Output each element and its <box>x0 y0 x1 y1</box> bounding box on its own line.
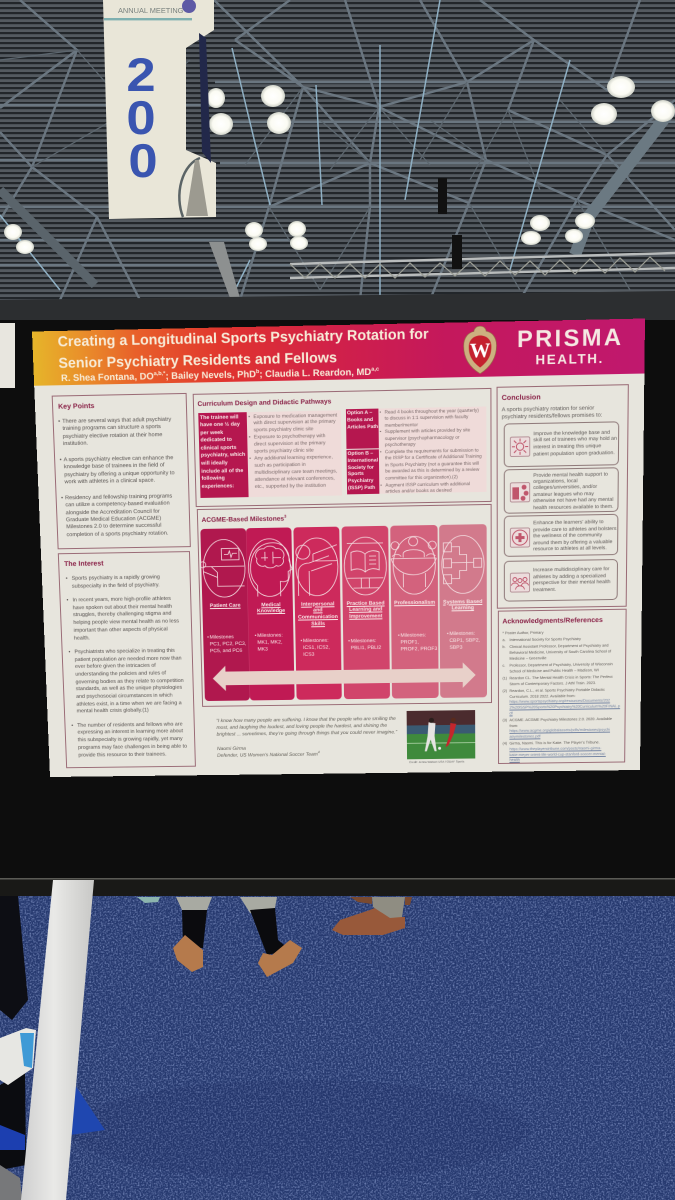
pink box: experiences: multidisciplinary care team meetings, <box>255 468 337 476</box>
card 2 text: otherwise not have had any mental <box>533 497 614 504</box>
carpet <box>0 896 675 1200</box>
references text: a. <box>502 638 506 642</box>
pink box: experiences: etc., supported by the institution <box>255 483 326 490</box>
interest text: programs may face challenges in being able to <box>78 744 187 751</box>
column 3: interpersonal and communication: Skills <box>311 621 325 627</box>
pink box: experiences: such as participation in <box>254 462 306 469</box>
key points text: work with athletes in a clinical space. <box>64 478 155 486</box>
red box: trainee commitment: will ideally <box>201 460 228 467</box>
column 2: medical knowledge <box>254 602 286 652</box>
column 3: interpersonal and communication: Milestones: <box>303 638 329 644</box>
systems based icon <box>443 543 451 552</box>
key points text: Residency and fellowship training programs <box>65 493 172 501</box>
panel: ACGME milestones <box>197 504 492 707</box>
pink box: options text: member/mentor <box>385 422 418 427</box>
banner sign 200: 2 <box>126 49 156 101</box>
references text: Medicine – Greenville <box>509 656 546 660</box>
references text: (3) <box>502 719 507 722</box>
column 3: interpersonal and communication: ICS3 <box>303 651 314 657</box>
card 1 text: interest in treating this unique <box>533 443 601 451</box>
pink box: experiences <box>247 410 342 497</box>
card 2 text: Provide mental health support to <box>533 471 608 478</box>
soccer photo <box>406 710 476 760</box>
pink box: options text: the ISSP for a Certificate of Additional Training <box>385 454 482 461</box>
column 4: practice based learning: Learning and <box>349 607 382 613</box>
panel: conclusion <box>497 384 629 609</box>
column 5: professionalism: Milestones: <box>400 632 426 639</box>
option A label: Books and <box>347 417 373 423</box>
interest text: patient population are needed more now than <box>75 655 182 663</box>
professionalism icon <box>409 537 418 546</box>
side tag on board <box>0 323 15 388</box>
references text: * Poster Author, Primary <box>502 630 544 635</box>
column 6: systems based learning <box>442 599 483 650</box>
key points text: Graduate Medical Education (ACGME) <box>66 516 161 523</box>
references text: from: <box>509 724 518 728</box>
card 1 text: patient population upon graduation. <box>533 450 615 458</box>
references text: b. <box>502 646 506 650</box>
column 2: medical knowledge: Knowledge <box>257 608 285 615</box>
milestone columns and icons <box>200 524 487 701</box>
pink box: options text: Read 4 books throughout the year (quarterly) <box>385 407 479 414</box>
card 3 text: around them by offering a valuable <box>533 539 612 546</box>
card 4 text: athletes by adding a specialized <box>533 573 606 580</box>
column 6: systems based learning: SBP3 <box>449 644 462 650</box>
references text: Girma, Naomi. This is for Katie. The Player’s Tribune. <box>509 741 600 746</box>
column 2: medical knowledge: MK3 <box>257 646 268 652</box>
conclusion intro: A sports psychiatry rotation for senior <box>502 405 594 413</box>
university crest logo: W <box>466 337 487 361</box>
option A label <box>346 409 379 449</box>
interest text: In recent years, more high-profile athletes <box>72 596 171 603</box>
medical knowledge icon <box>250 542 293 597</box>
references text: Reardon CL. The Mental Health Crisis in Sports: The Perfect <box>509 675 613 681</box>
red box: trainee commitment: dedicated to <box>200 437 232 444</box>
photo credit: Credit: Jenna Watson USA TODAY Sports <box>409 760 464 764</box>
references text: Professor, Department of Psychiatry, University of Wisconsin <box>509 662 613 668</box>
pink box: experiences: Any additional learning experience, <box>254 454 333 462</box>
card 3 text: provide care to athletes and bolsters <box>533 526 616 533</box>
interest text: ever before given the intricacies of <box>75 663 156 670</box>
panel: key points <box>52 393 191 549</box>
option B label <box>346 449 379 494</box>
references text <box>502 630 620 763</box>
heading: conclusion: Conclusion <box>502 394 541 402</box>
pink box: experiences: sports psychiatry clinic site <box>254 427 314 434</box>
red box: trainee commitment: include all of the <box>201 468 243 474</box>
quote: Defender, US Women’s National Soccer Team4 <box>217 750 320 759</box>
practice based learning icon <box>347 543 383 588</box>
column 5: professionalism <box>394 599 438 652</box>
overhead lights <box>4 76 675 254</box>
heading: curriculum: Curriculum Design and Didactic Pathways <box>197 398 331 408</box>
card 3 text: the wellness of the community <box>533 533 602 540</box>
column 2: medical knowledge: Milestones: <box>257 633 283 639</box>
red box: trainee commitment: have one ½ day <box>200 422 240 428</box>
key points text: psychiatry by offering a unique opportunity to <box>64 470 175 478</box>
references text: International Society for Sports Psychiatry <box>509 637 581 642</box>
conclusion intro: psychiatry residents/fellows promises to: <box>502 412 602 421</box>
card 2 text: health resources available to them. <box>533 503 613 511</box>
title: Senior Psychiatry Residents and Fellows <box>58 348 337 370</box>
key points text: completion of a sports psychiatry rotation. <box>66 530 168 538</box>
banner sign 200 <box>103 0 216 219</box>
interest text: expressing an interest in learning more about <box>77 729 183 736</box>
pink box: experiences: attendance at relevant conferences, <box>255 476 335 483</box>
banner sign 200: 0 <box>128 135 158 187</box>
column 2: medical knowledge: MK1, MK2, <box>257 639 282 646</box>
heading: key points: Key Points <box>58 403 95 411</box>
interpersonal icon <box>296 545 310 559</box>
key points text: Milestones 2.0 to determine successful <box>66 523 161 531</box>
references text: Curriculum. 2018 2022. Available from: <box>509 694 575 699</box>
card 3 text: Enhance the learners’ ability to <box>533 519 604 527</box>
red box: trainee commitment: experiences: <box>202 483 234 490</box>
interest text: standards, as well as the unique physiologies <box>76 685 182 692</box>
card 2 text: amateur leagues who may <box>533 491 594 498</box>
column 3: interpersonal and communication: ICS1, ICS2, <box>303 644 330 651</box>
interest text: health. <box>74 635 90 641</box>
column 4: practice based learning: PBLI1, PBLI2 <box>351 645 381 651</box>
column 1: patient care <box>207 602 246 654</box>
icon: mental health network <box>510 482 530 503</box>
key points text: institution. <box>63 441 88 447</box>
icon: lightbulb gear <box>510 436 530 457</box>
references text: School of Medicine and Public Health – Madison, WI <box>509 668 599 673</box>
pink box: experiences: with direct supervision at the primary <box>253 419 336 427</box>
column 2: medical knowledge: Medical <box>261 602 281 608</box>
references text: https://www.theplayerstribune.com/posts/naomi-girma- <box>509 746 601 751</box>
option B label: Option B – <box>348 450 373 457</box>
title <box>57 325 429 370</box>
interest text: Psychiatrists who specialize in treating this <box>74 648 175 655</box>
pink box: options text: articles and/or books as desired <box>385 488 452 494</box>
column 5: professionalism: Professionalism <box>394 599 435 606</box>
column 4: practice based learning <box>346 600 385 651</box>
option A label: Articles Path <box>347 423 378 430</box>
references text: https://www.sportspsychiatry.org/resources/Documents/202 <box>509 699 610 704</box>
interest text: mental health crisis globally.(1) <box>77 708 149 715</box>
conclusion card 2 <box>504 467 619 513</box>
conclusion intro <box>502 405 602 421</box>
legs and shoes <box>137 897 412 977</box>
card 1 text <box>533 429 617 458</box>
Prisma Health logo <box>517 323 624 367</box>
ceiling <box>0 0 675 305</box>
option B label: Sports <box>348 471 364 478</box>
quote: “I know how many people are suffering. I know that the people who are smiling the <box>216 716 396 724</box>
title: Creating a Longitudinal Sports Psychiatry Rotation for <box>57 325 429 349</box>
column 3: interpersonal and communication <box>298 601 338 657</box>
icon: medical cross <box>510 527 530 548</box>
column 4: practice based learning: Practice Based <box>347 600 385 607</box>
column 4: practice based learning: Improvement <box>349 614 382 620</box>
interest text: The number of residents and fellows who are <box>77 721 183 729</box>
references text: (4) <box>502 742 507 746</box>
card 1 text: skill set of trainees who may hold an <box>533 436 617 444</box>
key points text: knowledge base of trainees in the field of <box>64 463 165 471</box>
column 6: systems based learning: CBP1, SBP2, <box>449 637 480 644</box>
pink box: experiences: Exposure to medication management <box>253 412 337 420</box>
references text: (1) <box>502 677 507 681</box>
key points text: A sports psychiatry elective can enhance the <box>64 455 173 463</box>
card 2 text: organizations, local <box>533 478 578 485</box>
heading: milestones: ACGME-Based Milestones3 <box>202 513 286 524</box>
display board frame <box>0 291 675 896</box>
column 1: patient care: PC5, and PC6 <box>210 648 242 654</box>
conclusion card 3 <box>504 514 618 557</box>
pink box: options text: supervisor (psychopharmacology or <box>385 434 459 441</box>
key points text: training programs can structure a sports <box>62 424 161 432</box>
references text: Clinical Assistant Professor, Department of Psychiatry and <box>509 644 609 649</box>
option B label: (ISSP) Path <box>348 485 375 491</box>
option B label: International <box>348 457 378 464</box>
Prisma Health logo: PRISMA <box>517 323 624 352</box>
option B label: Society for <box>348 464 374 471</box>
heading: acknowledgments: Acknowledgments/References <box>502 617 603 625</box>
conclusion card 1 <box>504 421 619 467</box>
lighting truss <box>209 178 675 298</box>
interest text: understanding the policies and rules of <box>75 670 166 678</box>
interest text: provide this resource to their trainees. <box>78 751 166 758</box>
icon: team of people <box>510 572 530 593</box>
pink box: experiences: sports psychiatry clinic site <box>254 448 314 455</box>
references text: katie-meyer-orient-life-world-cup-stanford-soccer-mental- <box>509 752 606 757</box>
card 2 text: colleges/universities, and/or <box>533 484 597 491</box>
references text: df <box>509 711 513 715</box>
red box: trainee commitment <box>198 412 249 498</box>
conclusion card 4 <box>504 559 618 601</box>
red box: trainee commitment: per week <box>200 430 223 436</box>
references text: c. <box>502 664 505 668</box>
key points text: alongside the Accreditation Council for <box>66 508 160 516</box>
patient care icon <box>221 548 239 560</box>
interest text: this subspecialty is growing rapidly, yet many <box>78 736 183 743</box>
Prisma Health logo: HEALTH. <box>535 351 604 367</box>
quote: most, and laughing the loudest, and loving people the hardest, and shining the <box>216 723 387 731</box>
card 4 text: perspective for their mental health <box>533 580 610 587</box>
references text: Reardon, C.L., et al. Sports Psychiatry Portable Didactic <box>509 688 605 693</box>
interest text: subspecialty in the field of psychiatry. <box>72 582 160 589</box>
interest text: have spoken out about their mental health <box>73 604 172 611</box>
interest text: Sports psychiatry is a rapidly growing <box>72 574 160 582</box>
references text: Behavioral Medicine, University of South Carolina School of <box>509 650 611 655</box>
key points text: psychiatry elective rotation at their home <box>63 432 162 440</box>
interest text: governing bodies as they relate to competition <box>75 678 184 685</box>
quote: brightest ... sometimes, they’re going through things that you could never imagine.” Naomi Girma <box>217 730 397 752</box>
university crest logo <box>463 326 497 374</box>
pink box: options text: Supplement with articles provided by site <box>385 427 470 434</box>
option A label: Option A – <box>347 410 372 416</box>
column 6: systems based learning: Systems Based <box>443 599 482 605</box>
card 4 text <box>533 566 610 593</box>
pink box: experiences: direct supervision at the primary <box>254 440 326 448</box>
card 3 text: resource to athletes at all levels. <box>533 545 607 553</box>
red box: trainee commitment: The trainee will <box>200 414 239 421</box>
column 3: interpersonal and communication: Interpersonal <box>301 601 335 607</box>
pink box: options text: committee for this organization).(2) <box>385 474 458 481</box>
column 4: practice based learning: Milestones: <box>351 638 376 644</box>
panel: curriculum design <box>193 388 492 507</box>
banner sign 200: ANNUAL MEETING <box>118 6 184 15</box>
option B label: Psychiatry <box>348 478 374 484</box>
column 1: patient care: Patient Care <box>210 602 241 609</box>
card 2 text <box>533 471 614 511</box>
panel: the interest <box>58 551 196 768</box>
pink box: options text: Augment ISSP curriculum with additional <box>385 481 470 487</box>
interest text <box>66 574 187 758</box>
references text: https://www.acgme.org/globalassets/pdfs/milestones/psychi <box>509 728 610 733</box>
column 6: systems based learning: Milestones: <box>449 631 475 637</box>
poster <box>32 318 645 777</box>
references text: ACGME. ACGME Psychiatry Milestones 2.0. 2020. Available <box>509 717 612 722</box>
references text: Storm of Contemporary Factors. J Athl Train. 2023. <box>509 681 596 686</box>
interest text: athletes exist, in a time when we are facing a <box>76 700 182 707</box>
panel: acknowledgments and references <box>497 609 627 764</box>
pink box: options text: in Sports Psychiatry (not a guarantee this will <box>385 461 479 467</box>
interest text: and psychosocial circumstances in which <box>76 693 173 700</box>
references text: atrymilestones.pdf <box>509 734 540 739</box>
quote <box>216 716 398 759</box>
double arrow <box>212 662 476 691</box>
poster header banner <box>32 318 645 385</box>
key points text: can utilize a competency-based evaluation <box>65 501 170 508</box>
red box: trainee commitment: clinical sports <box>201 445 237 451</box>
pink box: options text: Complete the requirements for submission to <box>385 447 479 454</box>
interest text: helping people view mental health as no less <box>73 619 179 626</box>
pink box: options text: be awarded as this is determined by a review <box>385 467 479 474</box>
references text: (2) <box>502 689 507 693</box>
poster tube and items at lower left <box>0 880 105 1200</box>
column 5: professionalism: PROF1, <box>400 639 419 645</box>
column 6: systems based learning: Learning <box>452 605 474 612</box>
card 1 text: Improve the knowledge base and <box>533 429 610 437</box>
key points text: There are several ways that adult psychiatry <box>62 417 171 425</box>
red box: trainee commitment: following <box>201 476 225 482</box>
references text: health <box>509 758 520 762</box>
pink box: options text <box>378 406 487 494</box>
pink box: experiences: Exposure to psychotherapy with <box>254 433 325 441</box>
authors: R. Shea Fontana, DOa,b,*; Bailey Nevels, PhDb; Claudia L. Reardon, MDa,c <box>61 366 379 383</box>
red box: trainee commitment: psychiatry, which <box>201 452 245 459</box>
column 1: patient care: Milestones <box>210 634 234 641</box>
pink box: options text: to discuss in 1:1 supervision with faculty <box>385 414 468 421</box>
key points text <box>58 416 175 538</box>
column 3: interpersonal and communication: Communication <box>298 614 338 621</box>
card 4 text: treatment. <box>533 587 556 593</box>
column 3: interpersonal and communication: and <box>313 608 323 614</box>
references text: 2%20ISSP%20Sports%20Psychiatry%20Curriculum%20FINAL.p <box>509 704 620 710</box>
pink box: options text: psychotherapy <box>385 442 416 447</box>
card 3 text <box>533 519 616 553</box>
card 4 text: Increase multidisciplinary care for <box>533 566 609 574</box>
banner sign 200: 0 <box>126 92 156 144</box>
column 5: professionalism: PROF2, PROF3 <box>401 646 437 652</box>
heading: the interest: The Interest <box>64 560 104 568</box>
interest text: struggles, thereby challenging stigma and <box>73 611 171 619</box>
interest text: important than other aspects of physical <box>74 626 168 634</box>
column 1: patient care: PC1, PC2, PC3, <box>210 641 246 647</box>
